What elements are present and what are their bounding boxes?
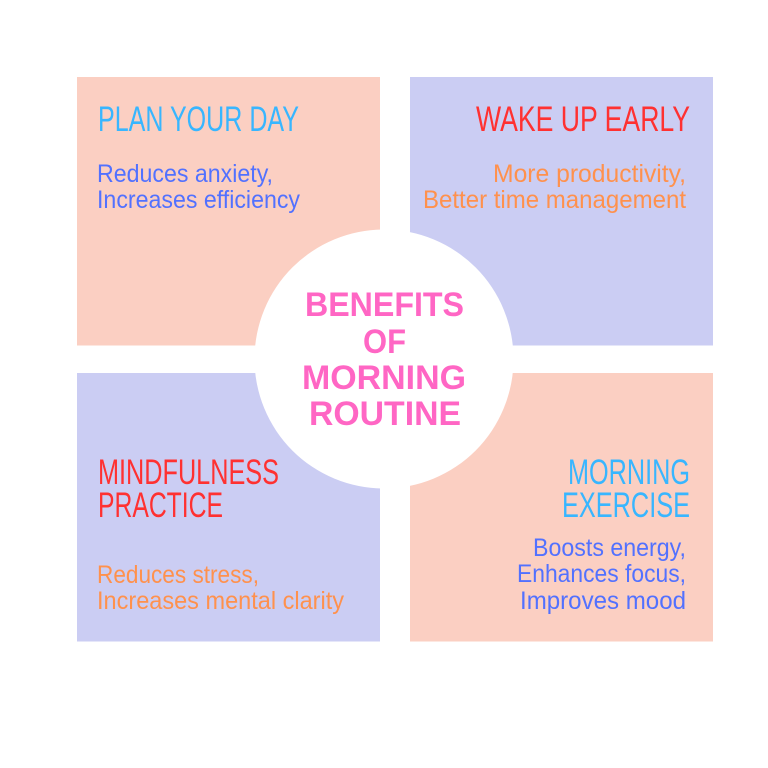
text: wake up early benefits: [423, 160, 686, 214]
heading: morning exercise: [562, 453, 690, 525]
heading: plan your day: PLAN YOUR DAY: [98, 100, 299, 139]
heading: mindfulness practice: MINDFULNESS: [98, 453, 279, 492]
text: wake up early benefits: Better time management: [423, 186, 686, 214]
center circle: [254, 230, 514, 488]
text: plan your day benefits: Reduces anxiety,: [97, 160, 273, 188]
text: mindfulness benefits: Reduces stress,: [97, 561, 259, 589]
text: plan your day benefits: [97, 160, 300, 214]
panel: plan your day: [77, 77, 380, 346]
title: ROUTINE: [309, 395, 461, 433]
heading: mindfulness practice: [98, 453, 279, 525]
title: OF: [363, 323, 406, 361]
text: mindfulness benefits: [97, 561, 344, 615]
panel: morning exercise: [410, 373, 713, 642]
heading: wake up early: WAKE UP EARLY: [476, 100, 690, 139]
panel: mindfulness practice: [77, 373, 380, 642]
title: MORNING: [302, 359, 466, 397]
title: [302, 286, 466, 433]
text: morning exercise benefits: Boosts energy,: [533, 534, 686, 562]
heading: morning exercise: EXERCISE: [562, 486, 690, 525]
panel: wake up early: [410, 77, 713, 346]
text: plan your day benefits: Increases efficiency: [97, 186, 300, 214]
heading: mindfulness practice: PRACTICE: [98, 486, 223, 525]
text: wake up early benefits: More productivity,: [493, 160, 686, 188]
heading: morning exercise: MORNING: [568, 453, 690, 492]
text: mindfulness benefits: Increases mental clarity: [97, 587, 344, 615]
text: morning exercise benefits: Improves mood: [520, 587, 686, 615]
text: morning exercise benefits: Enhances focus,: [517, 560, 686, 588]
text: morning exercise benefits: [517, 534, 686, 615]
title: BENEFITS: [305, 286, 464, 324]
